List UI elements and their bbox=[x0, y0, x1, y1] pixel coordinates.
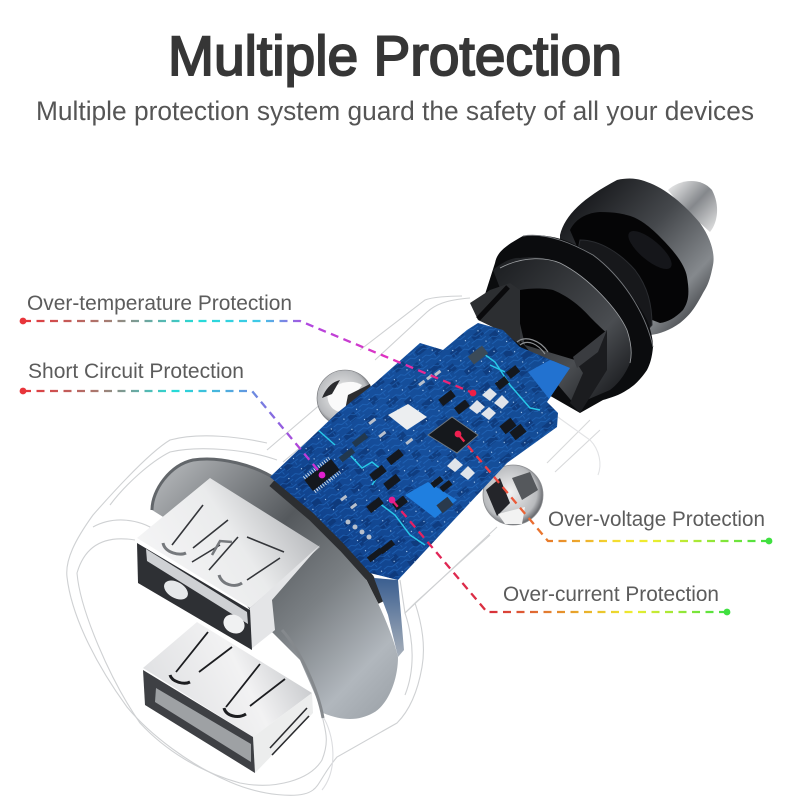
leader line: short circuit bbox=[23, 391, 322, 475]
bright copper area bbox=[405, 482, 457, 518]
label: short circuit: Short Circuit Protection bbox=[28, 360, 244, 383]
dark inner shell behind the USB ports bbox=[152, 459, 398, 719]
white chip bbox=[388, 404, 427, 430]
title: Multiple Protection bbox=[168, 24, 622, 87]
callout: short circuit protection bbox=[20, 360, 325, 478]
upper USB port bbox=[137, 478, 320, 650]
label: over-current: Over-current Protection bbox=[503, 583, 719, 606]
cyan traces bbox=[318, 354, 540, 545]
inner rim curve over the lower port bbox=[282, 630, 323, 718]
callout: over-current protection bbox=[389, 497, 730, 615]
metal ball left bbox=[317, 370, 373, 426]
plug tip bbox=[668, 181, 717, 232]
leader line: over-voltage bbox=[458, 434, 769, 541]
label: over-voltage: Over-voltage Protection bbox=[548, 508, 765, 531]
callout: over-voltage protection bbox=[455, 431, 772, 544]
port spring slots bbox=[163, 505, 284, 585]
chip pins bbox=[304, 459, 340, 491]
top right copper area bbox=[528, 360, 570, 399]
collar black interior bbox=[518, 288, 607, 360]
port side face bbox=[250, 545, 320, 650]
end dot bbox=[724, 609, 730, 615]
start dot bbox=[20, 388, 26, 394]
front collar ring bbox=[493, 257, 631, 405]
dark band under the circuit board bbox=[272, 483, 382, 602]
subtitle: Multiple protection system guard the safety of all your devices bbox=[36, 96, 754, 126]
lower port side face bbox=[253, 693, 313, 773]
threaded neck bbox=[570, 240, 652, 360]
rear plug dome bbox=[560, 179, 714, 335]
end dot bbox=[319, 472, 325, 478]
port front opening bbox=[137, 543, 252, 650]
port top face bbox=[137, 478, 320, 608]
small black chips bbox=[304, 346, 527, 562]
circuit board bbox=[270, 323, 570, 580]
board tail seen through the shell bbox=[374, 578, 404, 657]
collar highlight edge bbox=[500, 259, 631, 363]
contact spring bbox=[517, 339, 548, 354]
front plug disc bbox=[480, 235, 653, 413]
rear dome inner recess bbox=[623, 225, 677, 275]
chip dot bbox=[455, 431, 461, 437]
end dot bbox=[470, 390, 476, 396]
leader line: over-current bbox=[392, 500, 727, 612]
lower port spring slots bbox=[170, 632, 285, 716]
main processor chip bbox=[428, 417, 478, 453]
lower USB port bbox=[143, 622, 313, 773]
leader line: over-temperature bbox=[23, 321, 473, 393]
rear dome opening bbox=[570, 212, 688, 323]
metal ball right bbox=[483, 465, 543, 525]
transparent charger shell outlines bbox=[67, 296, 600, 795]
tiny light resistors bbox=[340, 370, 441, 540]
white pads bbox=[447, 388, 509, 480]
end dot bbox=[766, 538, 772, 544]
inner shell rim stroke bbox=[152, 459, 277, 510]
callout: over-temperature protection bbox=[20, 292, 476, 396]
chip dot bbox=[389, 497, 395, 503]
start dot bbox=[20, 318, 26, 324]
lower port front opening bbox=[143, 670, 255, 773]
label: over-temperature: Over-temperature Protection bbox=[27, 292, 292, 315]
lower port top face bbox=[143, 622, 312, 737]
disc highlight edge bbox=[523, 235, 653, 347]
plug clip feet bbox=[470, 283, 607, 413]
